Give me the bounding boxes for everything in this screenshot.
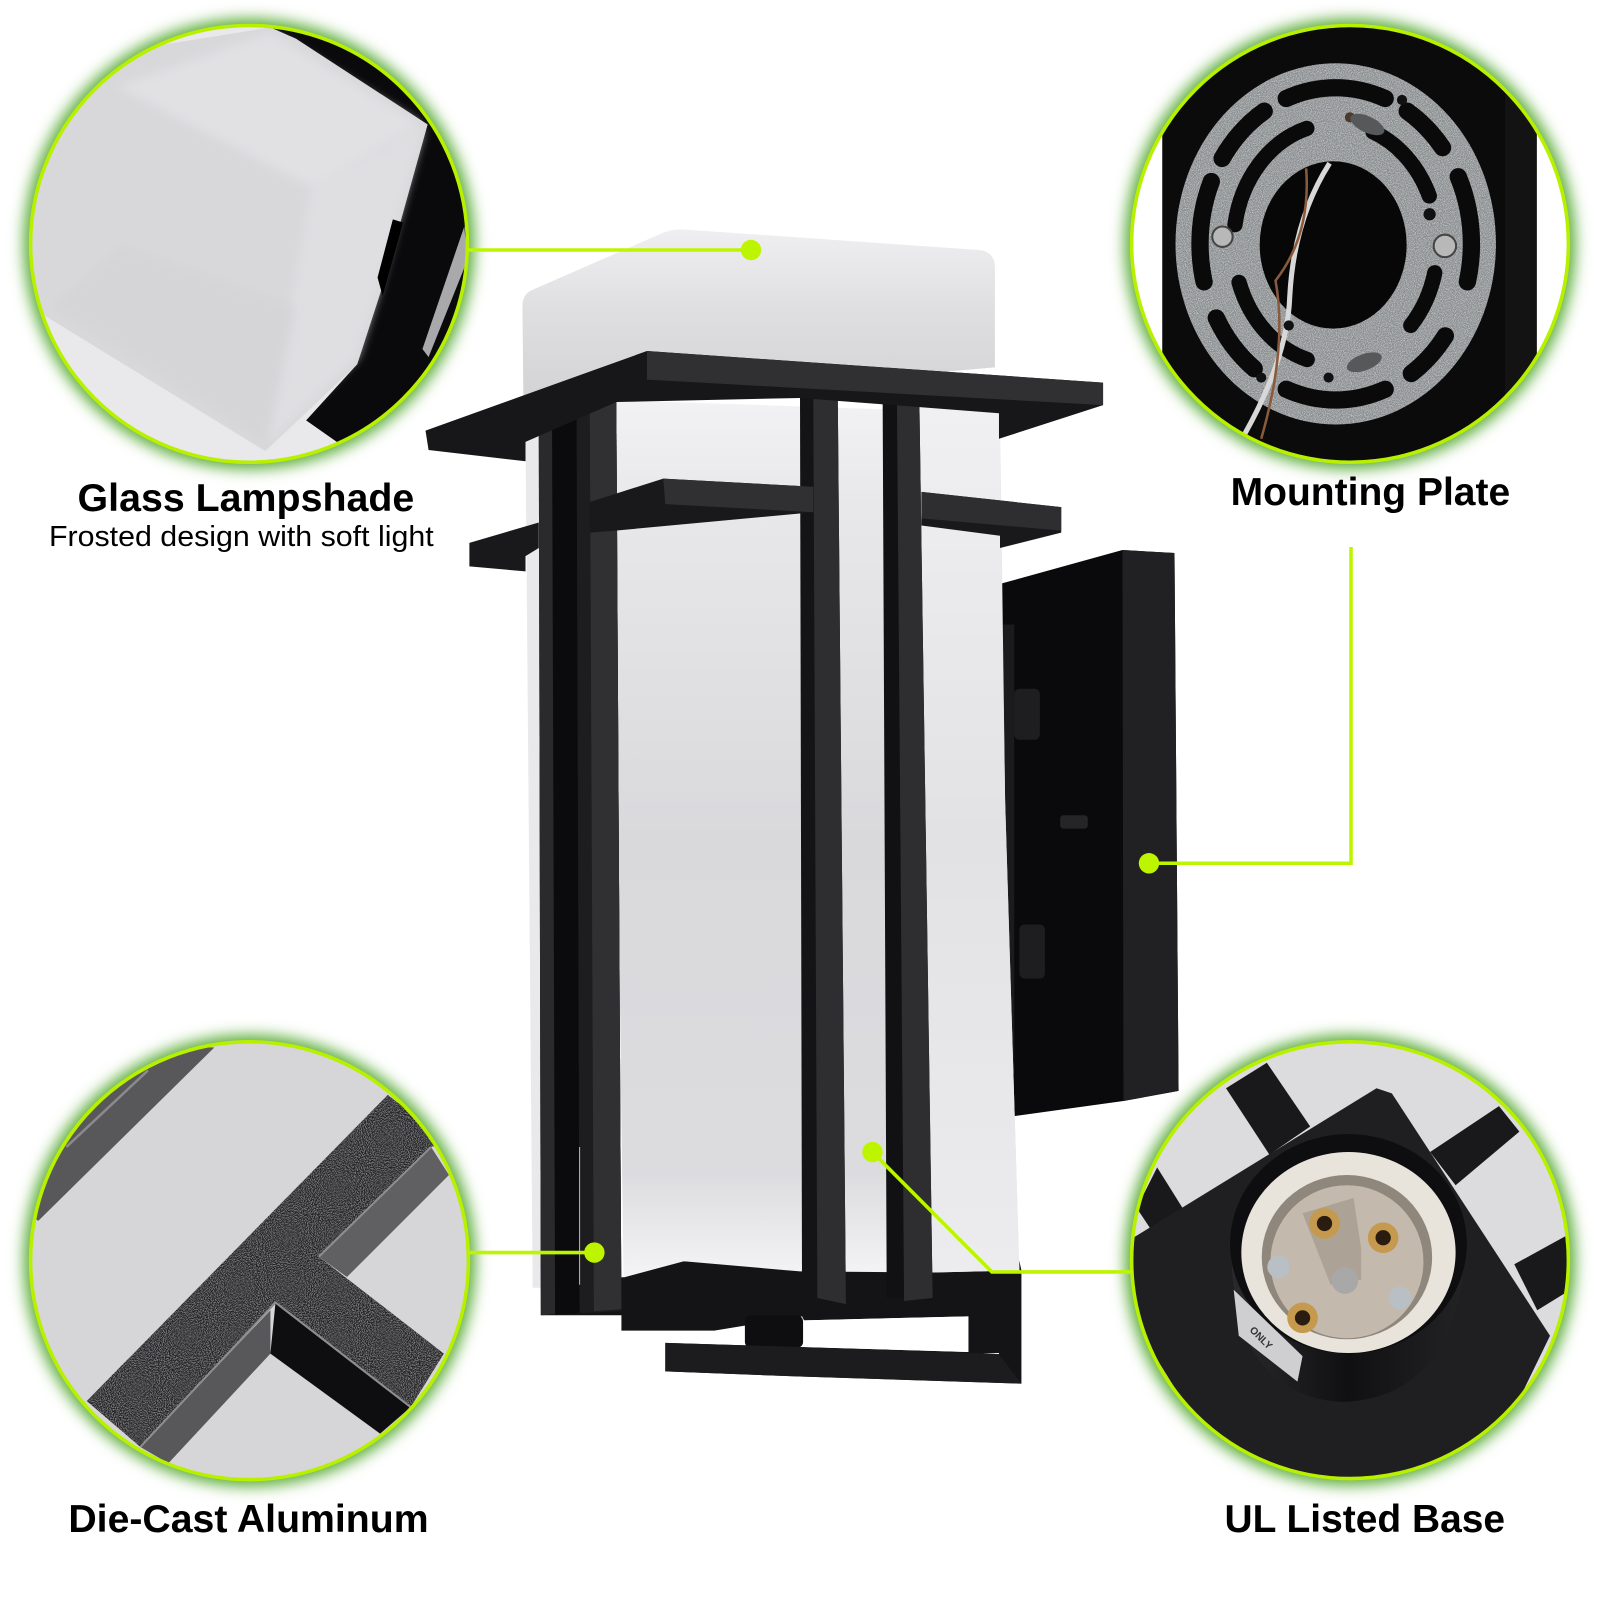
heading: Mounting Plate: Mounting Plate xyxy=(1231,471,1510,514)
heading: Glass Lampshade: Glass Lampshade xyxy=(78,477,414,520)
panel: mounting plate detail xyxy=(1124,18,1576,469)
mounting plate close-up photo xyxy=(1162,20,1537,469)
circle glow xyxy=(1124,18,1576,469)
callout line: glass lampshade xyxy=(468,240,761,260)
frosted glass shade body xyxy=(526,400,1019,1288)
callout line: mounting plate xyxy=(1139,547,1351,873)
heading: UL Listed Base: UL Listed Base xyxy=(1224,1498,1505,1541)
circle glow xyxy=(23,1035,476,1487)
circle outline xyxy=(31,26,467,462)
wall back plate xyxy=(1001,550,1179,1117)
callout line: die-cast aluminum xyxy=(468,1242,605,1263)
frame bar right xyxy=(883,400,933,1301)
circle outline xyxy=(1132,1042,1568,1479)
callout line: UL listed base xyxy=(862,1142,1133,1272)
panel: die-cast aluminum detail xyxy=(20,1031,480,1490)
wall lantern product xyxy=(426,229,1179,1384)
white circle base xyxy=(1132,26,1568,462)
lamp socket close-up photo xyxy=(1133,1044,1567,1477)
frosted glass shade top xyxy=(522,229,995,408)
circle outline xyxy=(1132,26,1568,462)
circle glow xyxy=(1124,1035,1576,1486)
circle glow xyxy=(23,18,474,469)
lampshade close-up photo xyxy=(32,27,466,460)
panel: glass lampshade detail xyxy=(20,15,480,480)
aluminum frame close-up photo xyxy=(32,1044,467,1478)
subheading: frosted design: Frosted design with soft light xyxy=(49,521,434,553)
heading: Die-Cast Aluminum: Die-Cast Aluminum xyxy=(68,1498,429,1541)
socket label: ONLY xyxy=(1247,1325,1274,1352)
top roof frame xyxy=(426,351,1103,461)
middle crossbar xyxy=(469,479,1061,571)
frame bar left xyxy=(539,400,621,1315)
circle outline xyxy=(31,1042,468,1480)
lower base bracket xyxy=(543,1261,1021,1384)
socket label xyxy=(1234,1290,1303,1382)
frame bar centre xyxy=(800,393,846,1306)
panel: UL listed base detail xyxy=(1122,1031,1582,1514)
